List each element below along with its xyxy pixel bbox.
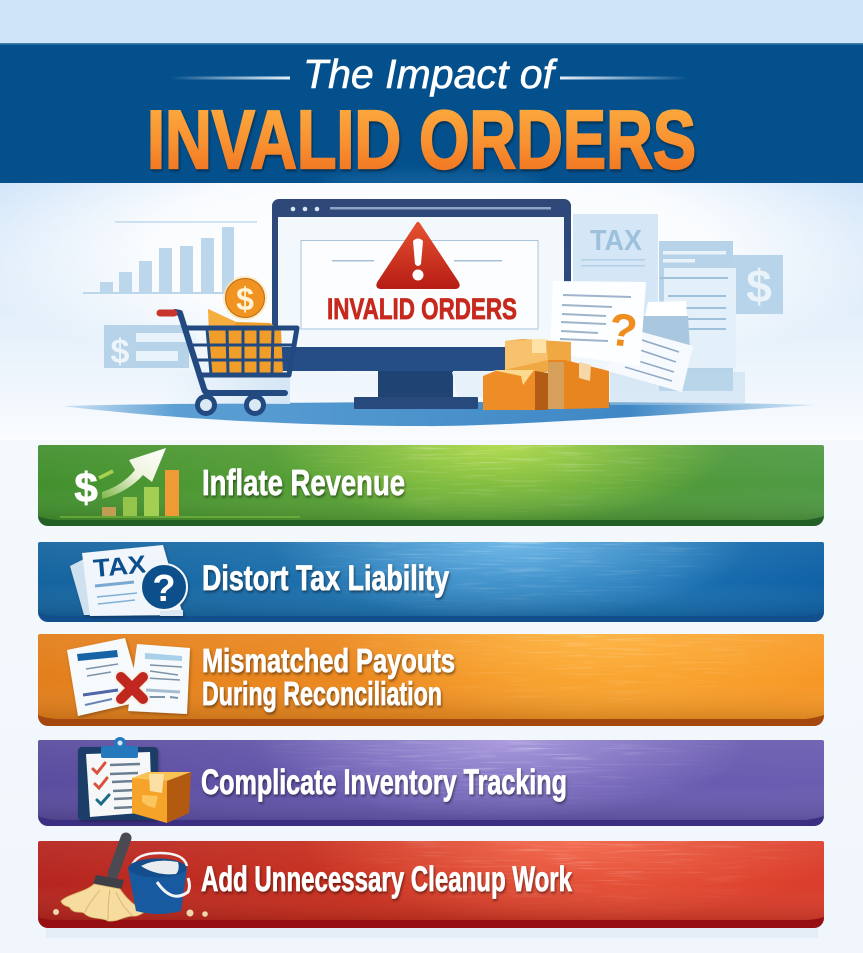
label: Mismatched Payouts xyxy=(202,642,455,679)
question mark: ? xyxy=(605,302,641,358)
screen label: INVALID ORDERS xyxy=(327,293,517,326)
computer monitor xyxy=(272,199,571,409)
hero background xyxy=(0,183,863,440)
icon: rising revenue chart: $ xyxy=(74,464,98,511)
icon: tax form and question: ? xyxy=(152,568,176,610)
title line: The Impact of: The Impact of xyxy=(303,51,558,97)
faded bar chart xyxy=(83,221,263,294)
label: Add Unnecessary Cleanup Work xyxy=(201,860,572,899)
faded dollar receipt: $ xyxy=(746,260,772,312)
shopping cart xyxy=(160,276,297,414)
question document stack xyxy=(550,281,693,392)
faded dollar card xyxy=(104,325,290,404)
icon: rising revenue chart xyxy=(60,448,300,517)
hero illustration xyxy=(62,199,818,426)
dollar coin: $ xyxy=(236,281,254,317)
icon: tax form and question: TAX xyxy=(92,550,148,583)
label: Distort Tax Liability xyxy=(202,559,449,598)
cardboard boxes xyxy=(483,339,609,410)
warning panel xyxy=(301,224,538,329)
warning triangle xyxy=(378,224,458,287)
faded tax document xyxy=(573,214,658,319)
bar 4: Complicate Inventory Tracking xyxy=(38,737,824,826)
bar 1: Inflate Revenue xyxy=(38,445,824,526)
title line: Invalid Orders: INVALID ORDERS xyxy=(147,93,696,186)
faded dollar receipt xyxy=(610,241,783,405)
bar 2: Distort Tax Liability xyxy=(38,542,824,622)
bar 5: Add Unnecessary Cleanup Work xyxy=(38,838,824,938)
icon: clipboard and box xyxy=(78,737,191,823)
icon: mismatched documents xyxy=(67,638,190,716)
label: Inflate Revenue xyxy=(202,462,405,503)
faded tax document: TAX xyxy=(590,225,643,257)
top sky strip xyxy=(0,0,863,44)
faded dollar card: $ xyxy=(111,333,130,371)
icon: mop and bucket xyxy=(53,838,208,921)
title banner xyxy=(0,43,863,192)
icon: tax form and question xyxy=(70,545,187,616)
ground swoosh xyxy=(62,402,818,426)
label: Complicate Inventory Tracking xyxy=(201,763,567,802)
label second line: During Reconciliation xyxy=(202,675,442,712)
bar 3: Mismatched Payouts During Reconciliation xyxy=(38,634,824,726)
